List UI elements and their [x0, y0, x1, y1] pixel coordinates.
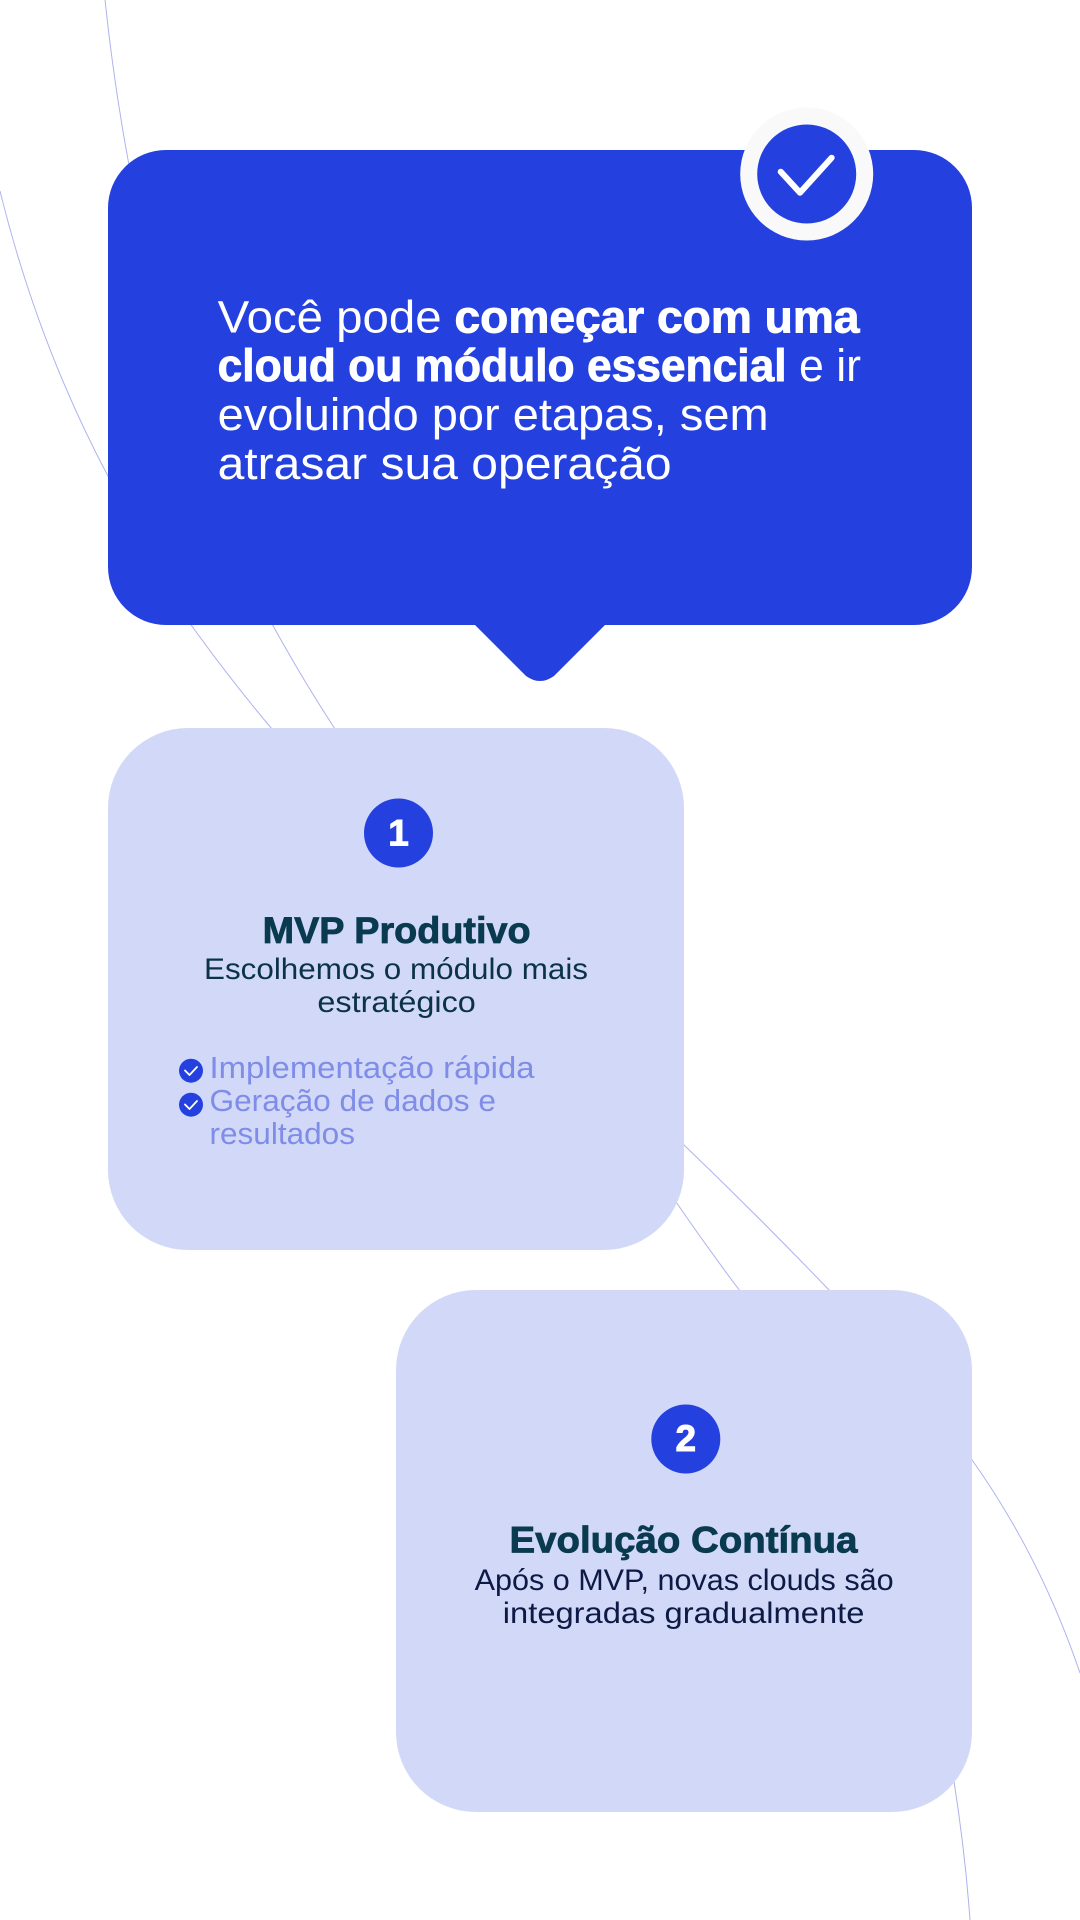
list item: Implementação rápida: Implementação rápida: [210, 1051, 535, 1085]
callout text: e ir: [799, 340, 861, 391]
description: [204, 953, 588, 1019]
card background: [396, 1290, 972, 1812]
callout text: atrasar sua operação: [218, 438, 672, 489]
list item: Geração de dados e resultados: Geração de dados e: [210, 1084, 496, 1118]
number badge 2: [651, 1404, 720, 1474]
list item: Geração de dados e resultados: [210, 1084, 496, 1151]
number badge 1: [364, 798, 433, 868]
card background: [108, 728, 684, 1250]
number badge 1: 1: [388, 812, 409, 854]
icon: check 2: [179, 1093, 203, 1117]
callout text: evoluindo por etapas, sem: [218, 389, 769, 440]
callout text: Você pode: [218, 292, 442, 342]
description: integradas gradualmente: [503, 1597, 864, 1630]
description: Escolhemos o módulo mais: [204, 953, 588, 986]
description: [475, 1564, 894, 1630]
callout text: começar com uma: [454, 292, 860, 342]
icon: check 1: [179, 1059, 203, 1083]
description: estratégico: [317, 986, 476, 1019]
description: Após o MVP, novas clouds são: [475, 1564, 894, 1597]
heading: MVP Produtivo: MVP Produtivo: [263, 910, 531, 951]
checklist: [179, 1051, 535, 1151]
callout text: [218, 292, 861, 489]
list item: Geração de dados e resultados: resultados: [210, 1117, 355, 1151]
bubble body: [108, 150, 972, 681]
heading: Evolução Contínua: Evolução Contínua: [510, 1520, 858, 1561]
number badge 2: 2: [676, 1418, 696, 1459]
panel: step 2 Evolução Contínua: [396, 1290, 972, 1812]
panel: speech bubble callout: [108, 108, 972, 681]
panel: step 1 MVP Produtivo: [108, 728, 684, 1250]
icon: check mark badge: [740, 108, 873, 240]
callout text: cloud ou módulo essencial: [218, 340, 787, 391]
